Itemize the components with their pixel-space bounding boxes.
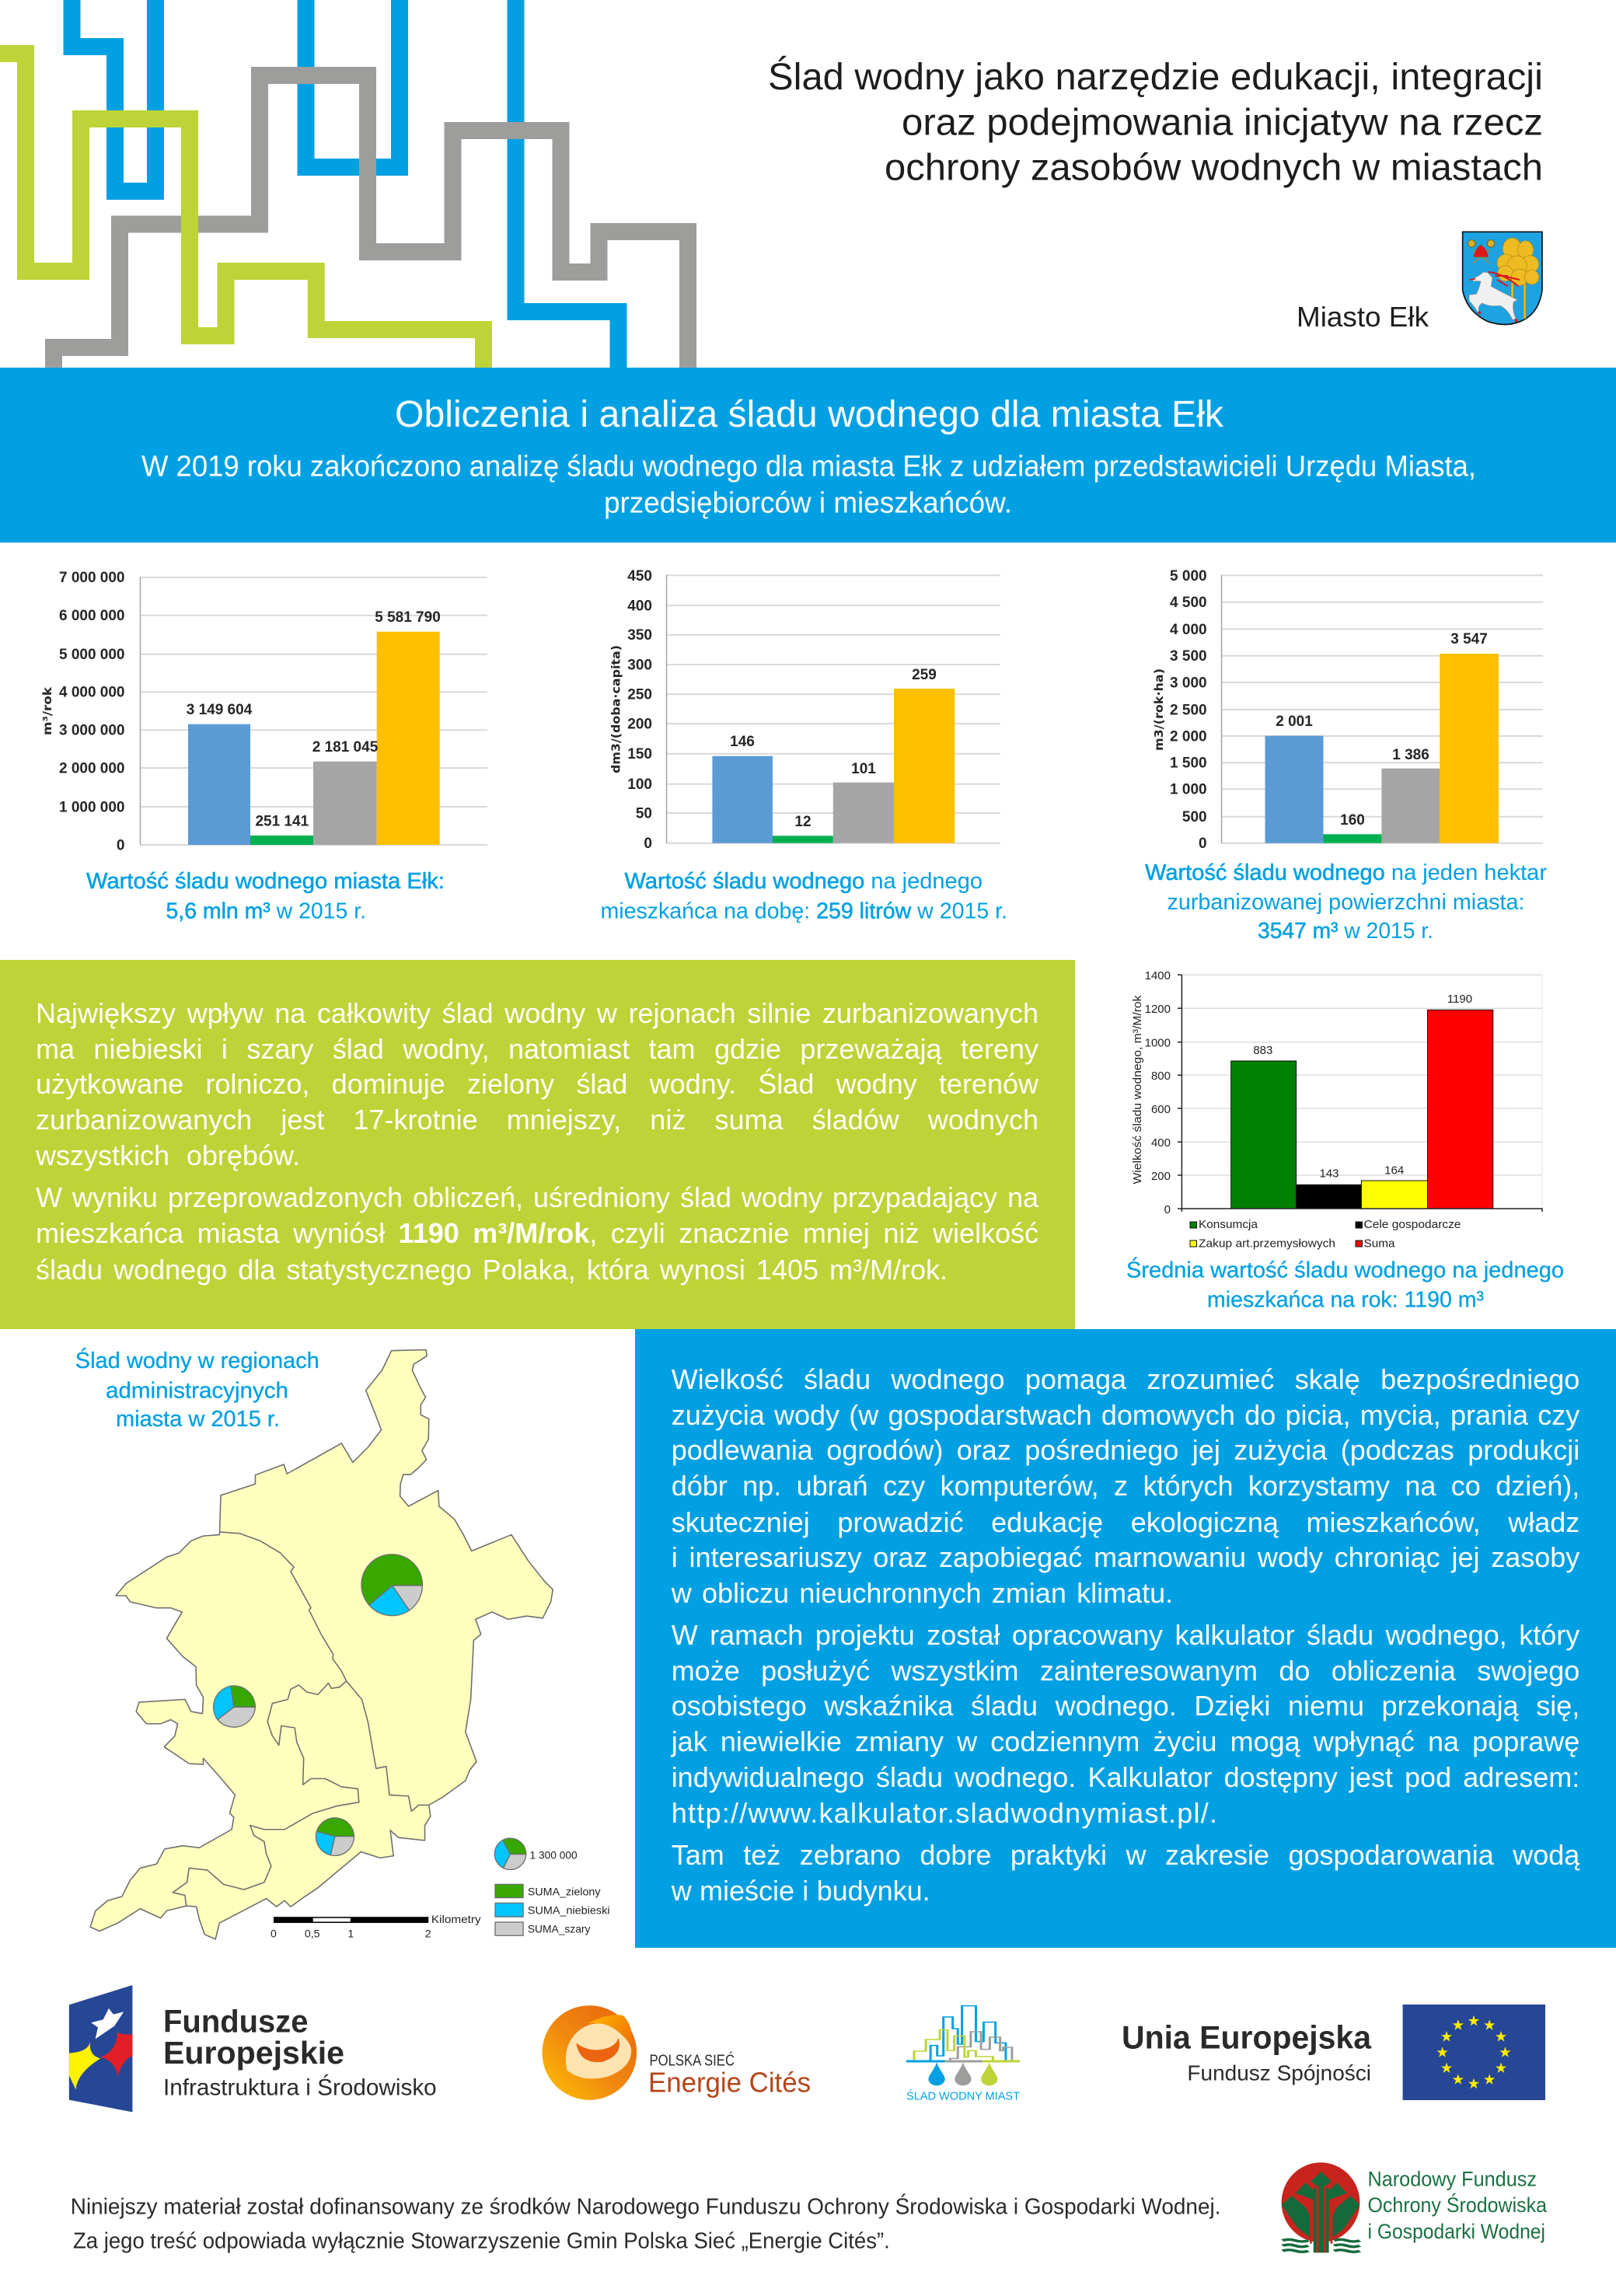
bar chart: total footprint: 5 000 000 (59, 647, 124, 663)
panel: green text block: ma niebieski i szary ślad wodny, natomiast tam gdzie przeważają tereny (36, 1033, 1038, 1065)
bar chart: per resident per year: 800 (1151, 1069, 1171, 1083)
chart legend (1190, 1219, 1461, 1250)
map scale bar: 0,5 (305, 1927, 320, 1939)
bar chart: per resident per year: 600 (1151, 1103, 1171, 1116)
chart legend: Suma (1363, 1237, 1395, 1250)
caption: per hectare: zurbanizowanej powierzchni miasta: (1167, 890, 1525, 915)
panel: blue text block: osobistego wskaźnika śladu wodnego. Dzięki niemu przekonają się, (672, 1690, 1579, 1722)
panel: blue text block: jak niewielkie zmiany w codziennym życiu mogą wpłynąć na poprawę (672, 1725, 1579, 1757)
bar chart: per resident per year: 883 (1253, 1044, 1272, 1057)
panel: blue text block: http://www.kalkulator.sladwodnymiast.pl/. (672, 1797, 1218, 1829)
bar chart: per hectare: 3 000 (1170, 675, 1207, 692)
bar chart: per hectare: 4 000 (1170, 622, 1207, 638)
banner text: przedsiębiorców i mieszkańców. (604, 487, 1012, 519)
panel: blue text block: skuteczniej prowadzić edukację ekologiczną mieszkańców, władz (672, 1506, 1579, 1538)
logo: Narodowy Fundusz: i Gospodarki Wodnej (1368, 2220, 1545, 2243)
map: city regions with pies (90, 1350, 609, 1939)
bar chart: per resident per day: 200 (627, 717, 652, 732)
caption: total footprint: Wartość śladu wodnego miasta Ełk: (86, 869, 445, 894)
caption: per hectare: 3547 m³ w 2015 r. (1258, 919, 1433, 944)
bar chart: per resident per day: 50 (636, 805, 652, 822)
bar chart: per resident per year: 1000 (1145, 1037, 1171, 1049)
panel: green text block: wszystkich obrębów. (36, 1139, 300, 1171)
bar chart: per resident per year: 1190 (1447, 993, 1472, 1006)
bar chart: per resident per day: 250 (627, 687, 652, 703)
bar chart: total footprint: 2 181 045 (312, 739, 379, 755)
map scale bar: Kilometry (431, 1913, 482, 1925)
bar chart: total footprint: 6 000 000 (59, 608, 124, 624)
banner heading: Obliczenia i analiza śladu wodnego dla miasta Ełk (395, 394, 1224, 435)
bar chart: total footprint: 1 000 000 (59, 799, 124, 816)
bar chart: per resident per year: Wielkość śladu wodnego, m³/M/rok (1131, 995, 1144, 1185)
panel: green text block (0, 960, 1075, 1329)
panel: blue text block: Tam też zebrano dobre praktyki w zakresie gospodarowania wodą (672, 1839, 1579, 1871)
bar chart: per hectare: 160 (1340, 812, 1365, 829)
bar chart: total footprint (40, 570, 487, 853)
city name: Miasto Ełk (1297, 301, 1429, 333)
logo: Fundusze Europejskie: Europejskie (163, 2035, 344, 2071)
bar chart: total footprint: 2 000 000 (59, 760, 124, 777)
panel: blue text block: może posłużyć wszystkim zainteresowanym do obliczenia swojego (672, 1655, 1579, 1687)
bar chart: per resident per year: 400 (1151, 1136, 1171, 1150)
bar chart: per hectare: 1 000 (1170, 782, 1207, 797)
bar chart: per resident per year: 164 (1384, 1164, 1404, 1178)
logo: Ślad Wodny Miast (906, 2006, 1020, 2103)
bar chart: per hectare: m3/(rok·ha) (1152, 668, 1166, 751)
logo: Unia Europejska: Fundusz Spójności (1187, 2061, 1371, 2085)
title (768, 55, 1543, 188)
panel: blue text block: w mieście i budynku. (672, 1875, 930, 1907)
map legend (494, 1838, 609, 1935)
map legend: SUMA_niebieski (528, 1904, 609, 1917)
panel: blue text block: dóbr np. ubrań czy komputerów, z których korzystamy na co dzień), (672, 1470, 1579, 1502)
map scale bar (270, 1913, 482, 1939)
panel: green text block: W wyniku przeprowadzonych obliczeń, uśredniony ślad wodny przypadający na (36, 1181, 1038, 1213)
panel: blue text block: Wielkość śladu wodnego pomaga zrozumieć skalę bezpośredniego (672, 1363, 1579, 1395)
caption: per resident per day: mieszkańca na dobę: 259 litrów w 2015 r. (600, 899, 1007, 924)
chart legend: Cele gospodarcze (1363, 1219, 1461, 1231)
logo: Fundusze Europejskie (69, 1985, 437, 2112)
bar chart: per resident per day: 100 (627, 776, 652, 793)
panel: blue text block: podlewania ogrodów) oraz pośredniego jej zużycia (podczas produkcji (672, 1434, 1579, 1466)
logo: Fundusze Europejskie: Fundusze (163, 2003, 308, 2039)
caption: per resident per year: Średnia wartość śladu wodnego na jednego (1126, 1256, 1564, 1282)
map legend: SUMA_szary (528, 1923, 591, 1935)
panel: blue text block: w obliczu nieuchronnych zmian klimatu. (672, 1577, 1173, 1609)
bar chart: per resident per day: dm3/(doba·capita) (609, 645, 623, 773)
bar chart: per resident per day: 12 (794, 814, 811, 830)
panel: blue text block: W ramach projektu został opracowany kalkulator śladu wodnego, który (672, 1619, 1579, 1651)
bar chart: total footprint: 3 149 604 (187, 702, 253, 718)
icon: EU flag (1403, 2005, 1545, 2100)
chart legend: Konsumcja (1199, 1219, 1258, 1231)
funding note: Za jego treść odpowiada wyłącznie Stowarzyszenie Gmin Polska Sieć „Energie Cités”. (73, 2229, 890, 2254)
icon: city coat of arms (1463, 232, 1542, 324)
panel: green text block: mieszkańca miasta wyniósł 1190 m³/M/rok, czyli znacznie mniej niż wielkość (36, 1217, 1038, 1249)
caption: per resident per year: mieszkańca na rok: 1190 m³ (1207, 1288, 1484, 1313)
bar chart: per resident per year (1131, 969, 1542, 1250)
banner: analysis intro (0, 368, 1616, 543)
bar chart: per hectare: 2 500 (1170, 703, 1207, 718)
decorative skyline lines (0, 0, 688, 373)
bar chart: total footprint: 3 000 000 (59, 723, 124, 738)
caption: per hectare: Wartość śladu wodnego na jeden hektar (1145, 860, 1547, 885)
pie: southern region (316, 1818, 354, 1855)
bar chart: per resident per day: 400 (627, 598, 652, 614)
bar chart: per hectare: 2 000 (1170, 729, 1207, 745)
bar chart: per resident per day: 350 (627, 627, 652, 644)
logo: Unia Europejska (1122, 2005, 1545, 2100)
bar chart: total footprint: 0 (117, 838, 124, 853)
map legend: SUMA_zielony (528, 1885, 601, 1897)
bar chart: per hectare: 2 001 (1276, 714, 1313, 730)
bar chart: per resident per day: 0 (644, 836, 652, 852)
chart legend: Zakup art.przemysłowych (1199, 1237, 1335, 1250)
banner text (141, 451, 1476, 519)
panel: blue text block: indywidualnego śladu wodnego. Kalkulator dostępny jest pod adresem: (672, 1761, 1579, 1793)
bar chart: per hectare: 1 500 (1170, 755, 1207, 771)
pie: north-east region (361, 1555, 422, 1616)
bar chart: per hectare (1152, 568, 1543, 852)
bar chart: total footprint: 4 000 000 (59, 684, 124, 701)
map scale bar: 2 (425, 1927, 431, 1939)
map heading: miasta w 2015 r. (116, 1407, 280, 1432)
map heading: Ślad wodny w regionach (75, 1347, 319, 1373)
bar chart: per hectare: 3 500 (1170, 648, 1207, 665)
bar chart: total footprint: 251 141 (255, 814, 309, 830)
bar chart: per resident per day: 101 (851, 761, 876, 777)
caption: total footprint: 5,6 mln m³ w 2015 r. (166, 899, 366, 924)
bar chart: per resident per day: 150 (627, 746, 652, 762)
title: oraz podejmowania inicjatyw na rzecz (902, 103, 1543, 143)
caption: per resident per day: Wartość śladu wodnego na jednego (625, 869, 983, 894)
logo: Narodowy Fundusz: Ochrony Środowiska (1368, 2192, 1548, 2217)
caption: per hectare (1145, 860, 1547, 944)
map heading (75, 1347, 319, 1432)
bar chart: per hectare: 1 386 (1392, 747, 1429, 763)
bar chart: total footprint: 5 581 790 (375, 609, 441, 626)
funding note (71, 2193, 1220, 2254)
bar chart: per resident per year: 200 (1151, 1170, 1171, 1183)
logo: Narodowy Fundusz: Narodowy Fundusz (1368, 2168, 1537, 2191)
bar chart: per hectare: 4 500 (1170, 595, 1207, 611)
panel: green text block: zurbanizowanych jest 17-krotnie mniejszy, niż suma śladów wodnych (36, 1104, 1038, 1136)
panel: blue text block (635, 1329, 1616, 1948)
pie: western region (214, 1686, 255, 1727)
logo: Ślad Wodny Miast: ŚLAD WODNY MIAST (906, 2089, 1020, 2103)
panel: blue text block: zużycia wody (w gospodarstwach domowych do picia, mycia, prania czy (672, 1399, 1579, 1431)
bar chart: per resident per year: 1400 (1145, 969, 1171, 982)
tree crowns (1497, 238, 1539, 285)
caption: per resident per year (1126, 1256, 1564, 1313)
bar chart: per resident per day: 146 (730, 734, 755, 750)
bar chart: per hectare: 3 547 (1450, 631, 1488, 647)
title: ochrony zasobów wodnych w miastach (885, 148, 1543, 188)
funding note: Niniejszy materiał został dofinansowany ze środków Narodowego Funduszu Ochrony Środowiska i Gospodarki Wodnej. (71, 2193, 1220, 2219)
bar chart: per hectare: 5 000 (1170, 568, 1207, 584)
bar chart: per resident per year: 1200 (1145, 1003, 1171, 1016)
map scale bar: 1 (347, 1927, 354, 1939)
panel: green text block: użytkowane rolniczo, dominuje zielony ślad wodny. Ślad wodny terenów (36, 1068, 1038, 1100)
panel: green text block: Największy wpływ na całkowity ślad wodny w rejonach silnie zurbanizowanych (36, 997, 1038, 1029)
bar chart: per resident per year: 0 (1164, 1203, 1171, 1216)
caption: per resident per day (600, 869, 1007, 924)
title: Ślad wodny jako narzędzie edukacji, integracji (768, 55, 1543, 98)
panel: blue text block: i interesariuszy oraz zapobiegać marnowaniu wody chroniąc jej zasoby (672, 1541, 1579, 1573)
logo: Energie Cités: POLSKA SIEĆ (650, 2051, 735, 2069)
bar chart: per hectare: 0 (1199, 836, 1207, 852)
logo: Unia Europejska: Unia Europejska (1122, 2019, 1372, 2056)
logo: Narodowy Fundusz (1282, 2162, 1548, 2252)
bar chart: per resident per day: 300 (627, 658, 652, 673)
map legend: 1 300 000 (529, 1848, 578, 1861)
bar chart: per resident per day (609, 568, 1000, 852)
bar chart: per hectare: 500 (1182, 809, 1207, 825)
banner text: W 2019 roku zakończono analizę śladu wodnego dla miasta Ełk z udziałem przedstawicieli Urzędu Miasta, (141, 451, 1476, 483)
logo: Energie Cités (543, 2005, 811, 2100)
panel: green text block: śladu wodnego dla statystycznego Polaka, która wynosi 1405 m³/M/rok. (36, 1253, 948, 1286)
map heading: administracyjnych (106, 1378, 288, 1403)
bar chart: per resident per day: 450 (627, 568, 652, 584)
bar chart: per resident per day: 259 (912, 667, 937, 683)
logo: Energie Cités: Energie Cités (648, 2067, 811, 2099)
bar chart: total footprint: 7 000 000 (59, 570, 124, 586)
map scale bar: 0 (270, 1927, 277, 1939)
bar chart: per resident per year: 143 (1319, 1167, 1339, 1181)
caption: total footprint (86, 869, 445, 924)
bar chart: total footprint: m³/rok (40, 686, 54, 735)
logo: Fundusze Europejskie: Infrastruktura i Środowisko (163, 2074, 437, 2101)
